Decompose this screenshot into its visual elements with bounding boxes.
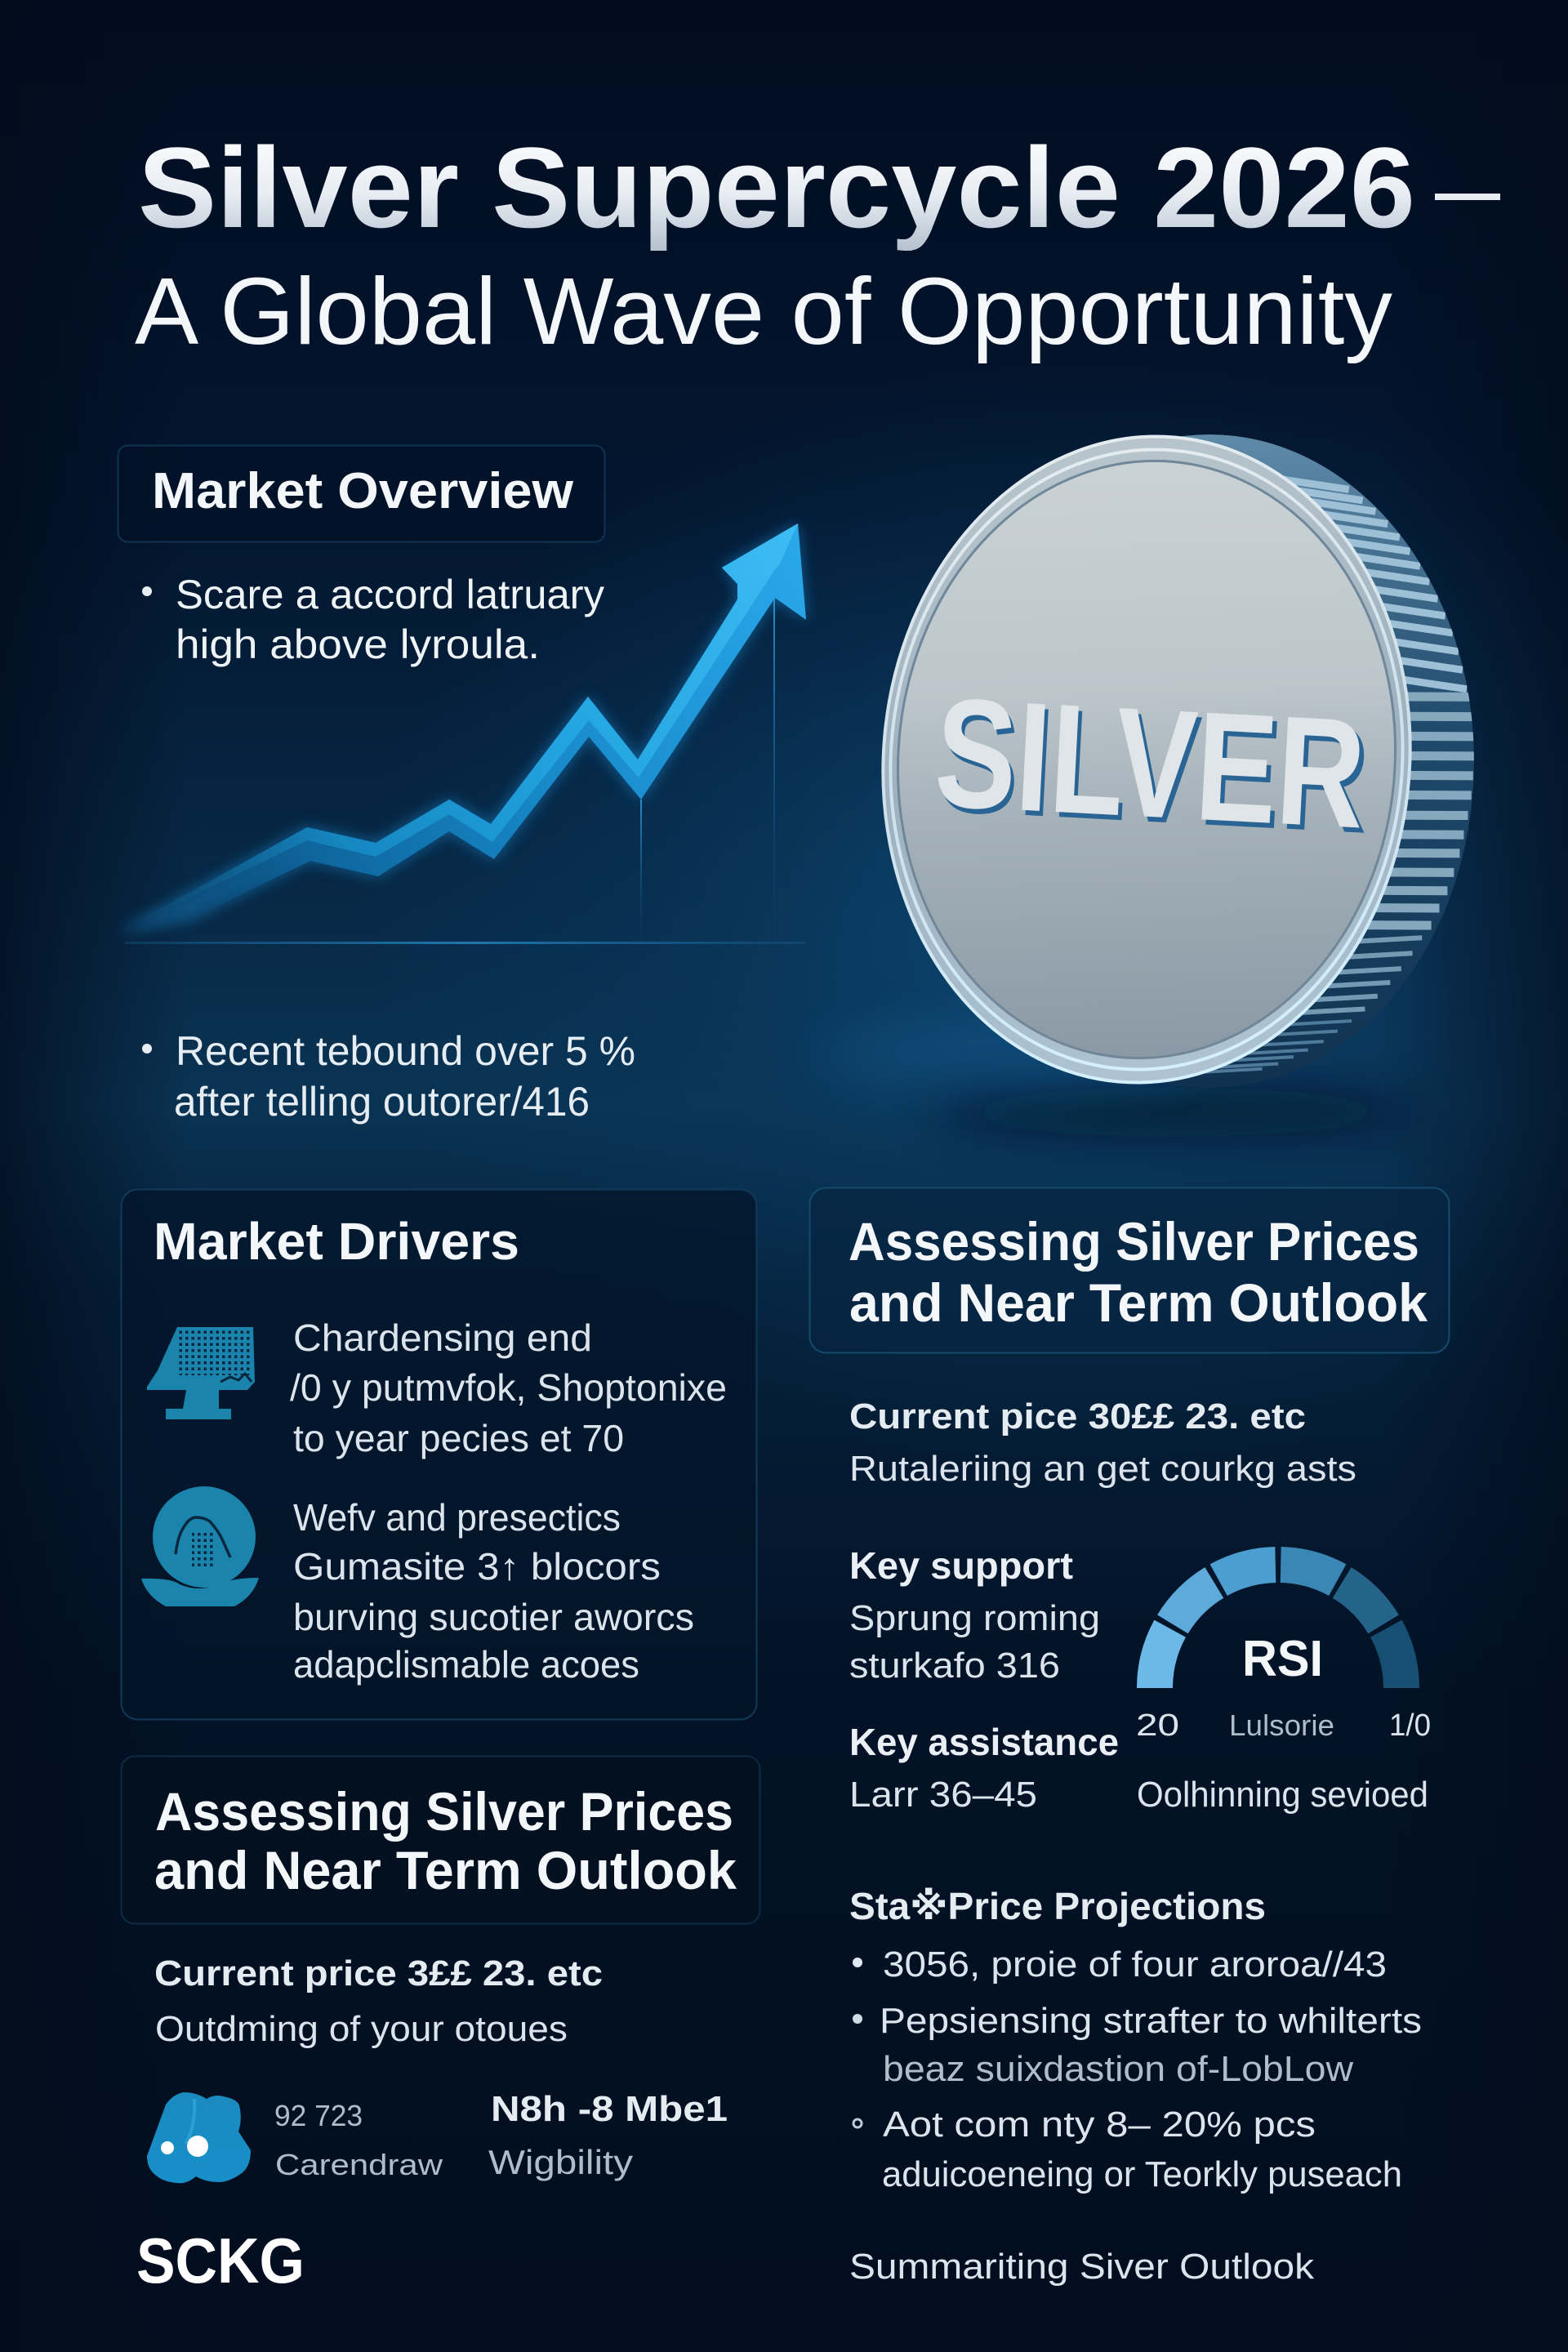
coin lettering: SILVER [934, 671, 1374, 866]
gauge scale [1136, 1708, 1431, 1743]
text: driver one: to year pecies et 70 [293, 1417, 624, 1459]
panel: assessing prices heading (right): Assessing Silver Prices [849, 1211, 1419, 1272]
gauge label: RSI [1242, 1631, 1323, 1687]
text: key support: Key support [849, 1544, 1073, 1587]
panel: assessing prices heading (left): and Near Term Outlook [154, 1840, 737, 1900]
panel: assessing prices heading (right): and Near Term Outlook [849, 1272, 1428, 1333]
text: driver two: Wefv and presectics [293, 1496, 621, 1539]
bullet three: aduicoeneing or Teorkly puseach [882, 2154, 1402, 2194]
stat: wigbility: N8h -8 Mbe1 [491, 2089, 728, 2129]
bullet three: Aot com nty 8– 20% pcs [883, 2105, 1316, 2145]
gauge caption: Oolhinning sevioed [1137, 1775, 1428, 1815]
title [135, 123, 1500, 364]
panel: market overview heading [118, 446, 604, 542]
text: driver two: adapclismable acoes [293, 1643, 639, 1686]
text: key assistance: Larr 36–45 [849, 1775, 1037, 1815]
text: key support: Sprung roming [849, 1598, 1100, 1638]
stat: wigbility: Wigbility [488, 2143, 633, 2181]
bullet text: overview second point: after telling outorer/416 [174, 1079, 590, 1125]
bullet two: Pepsiensing strafter to whilterts [880, 2001, 1422, 2041]
text: key support: sturkafo 316 [849, 1646, 1060, 1686]
icon: globe in bowl [141, 1486, 259, 1606]
bullet text: overview first point: high above lyroula. [176, 621, 540, 667]
panel: market overview heading: Market Overview [152, 463, 574, 519]
stat: carendraw [274, 2099, 443, 2181]
heading: market drivers: Market Drivers [154, 1212, 519, 1271]
gauge scale: Lulsorie [1229, 1708, 1334, 1742]
text: current price (right): Rutaleriing an get courkg asts [849, 1449, 1356, 1489]
bullet text: overview first point: Scare a accord latruary [176, 572, 604, 617]
text: key support [849, 1544, 1100, 1686]
logo: SCKG [136, 2225, 305, 2296]
title dash [1435, 194, 1500, 200]
bullet text: overview second point: Recent tebound over 5 % [176, 1028, 635, 1074]
text: key assistance: Key assistance [849, 1721, 1119, 1763]
text: current price (left): Current price 3££ 23. etc [154, 1953, 603, 1993]
text: driver two [293, 1496, 694, 1686]
text: current price (left): Outdming of your otoues [155, 2009, 568, 2049]
text: current price (left) [154, 1953, 603, 2049]
text: driver two: Gumasite 3↑ blocors [293, 1545, 661, 1588]
coin lettering: SILVER [931, 666, 1370, 862]
panel: assessing prices heading (left): Assessing Silver Prices [155, 1781, 733, 1842]
icon: monitor [147, 1327, 255, 1419]
gauge scale: 1/0 [1389, 1708, 1431, 1743]
bullet three [853, 2105, 1402, 2194]
text: key assistance [849, 1721, 1119, 1815]
chart: rising silver price line with arrow [123, 523, 806, 944]
icon: silver coin [817, 414, 1498, 1137]
panel: market drivers [121, 1189, 756, 1720]
bullet two: beaz suixdastion of-LobLow [883, 2049, 1353, 2089]
text: current price (right) [849, 1396, 1356, 1489]
panel: assessing prices heading (right) [810, 1187, 1449, 1352]
bullet text: overview second point [142, 1028, 635, 1125]
gauge scale: 20 [1136, 1708, 1179, 1743]
icon: blue blob [147, 2092, 251, 2183]
panel: assessing prices heading (left) [121, 1756, 760, 1924]
title line 1: Silver Supercycle 2026 [138, 123, 1415, 252]
stat: wigbility [488, 2089, 728, 2181]
footer text: Summariting Siver Outlook [849, 2247, 1315, 2287]
bullet one: 3056, proie of four aroroa//43 [883, 1944, 1387, 1984]
title line 2: A Global Wave of Opportunity [135, 258, 1392, 364]
text: current price (right): Current pice 30££ 23. etc [849, 1396, 1306, 1437]
bullet text: overview first point [142, 572, 604, 667]
text: driver one: /0 y putmvfok, Shoptonixe [290, 1366, 727, 1409]
text: driver one: Chardensing end [293, 1316, 592, 1359]
stat: carendraw: 92 723 [274, 2099, 363, 2132]
gauge: RSI [1136, 1565, 1431, 1815]
bullet two [853, 2001, 1422, 2089]
stat: carendraw: Carendraw [275, 2148, 443, 2181]
heading: projections: Sta※Price Projections [849, 1885, 1266, 1927]
text: driver two: burving sucotier aworcs [293, 1596, 694, 1638]
text block: price projections [849, 1885, 1422, 2194]
text: driver one [290, 1316, 727, 1459]
